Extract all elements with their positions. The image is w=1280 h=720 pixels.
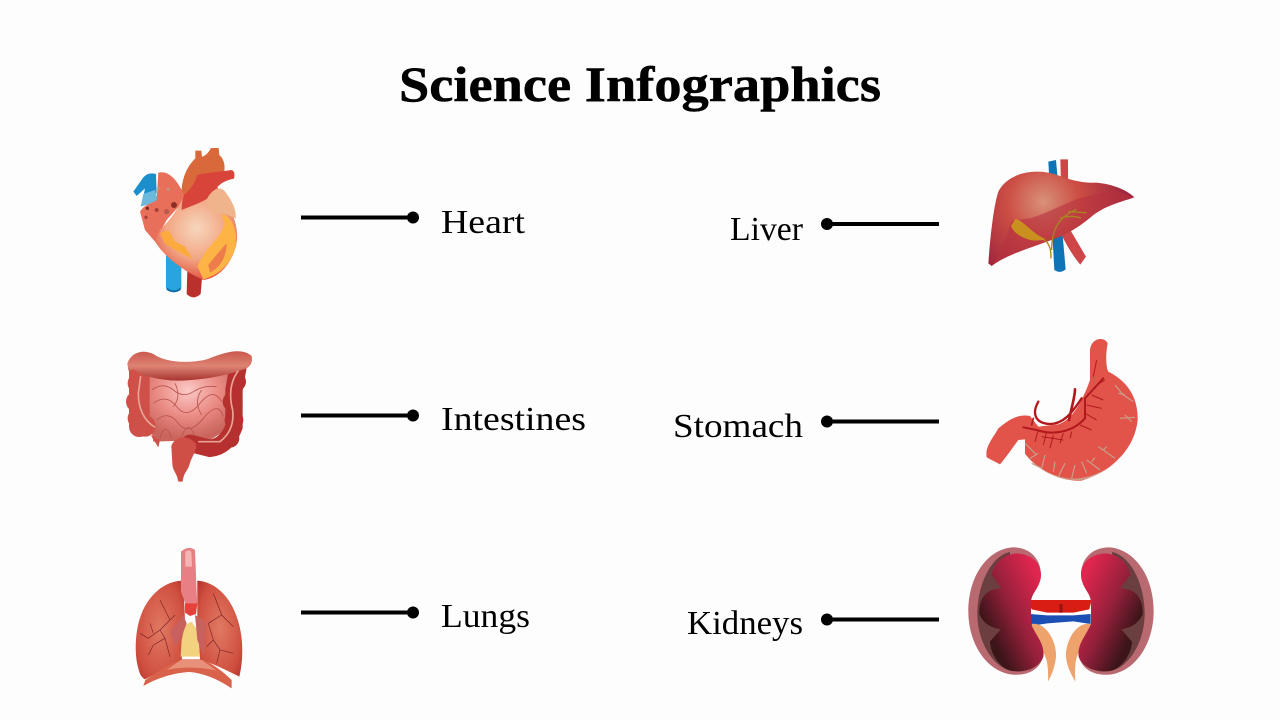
right ureter — [1066, 624, 1090, 682]
left kidney — [968, 547, 1044, 675]
rectum — [171, 437, 196, 482]
ascending colon — [126, 367, 160, 447]
title: Science Infographics — [399, 56, 881, 112]
transverse colon — [127, 351, 252, 381]
connector: kidneys — [821, 614, 939, 626]
connector: heart — [301, 212, 419, 224]
connector: lungs — [301, 606, 419, 618]
renal vessels — [1028, 600, 1092, 626]
icon: lungs — [136, 548, 242, 688]
icon: stomach — [986, 339, 1138, 481]
icon: intestines — [126, 351, 252, 482]
left ureter — [1032, 624, 1056, 682]
connector: stomach — [821, 416, 939, 428]
label: Stomach: Stomach — [673, 408, 803, 445]
right kidney — [1078, 547, 1154, 675]
label: Kidneys: Kidneys — [687, 605, 803, 642]
connector: liver — [821, 218, 939, 230]
icon: liver — [988, 159, 1134, 272]
icon: kidneys — [968, 547, 1154, 682]
label: Liver: Liver — [730, 211, 804, 248]
label: Intestines: Intestines — [441, 401, 586, 438]
label: Heart: Heart — [441, 204, 526, 241]
descending colon — [190, 365, 246, 455]
connector: intestines — [301, 410, 419, 422]
label: Lungs: Lungs — [441, 598, 530, 635]
icon: heart — [133, 148, 237, 297]
